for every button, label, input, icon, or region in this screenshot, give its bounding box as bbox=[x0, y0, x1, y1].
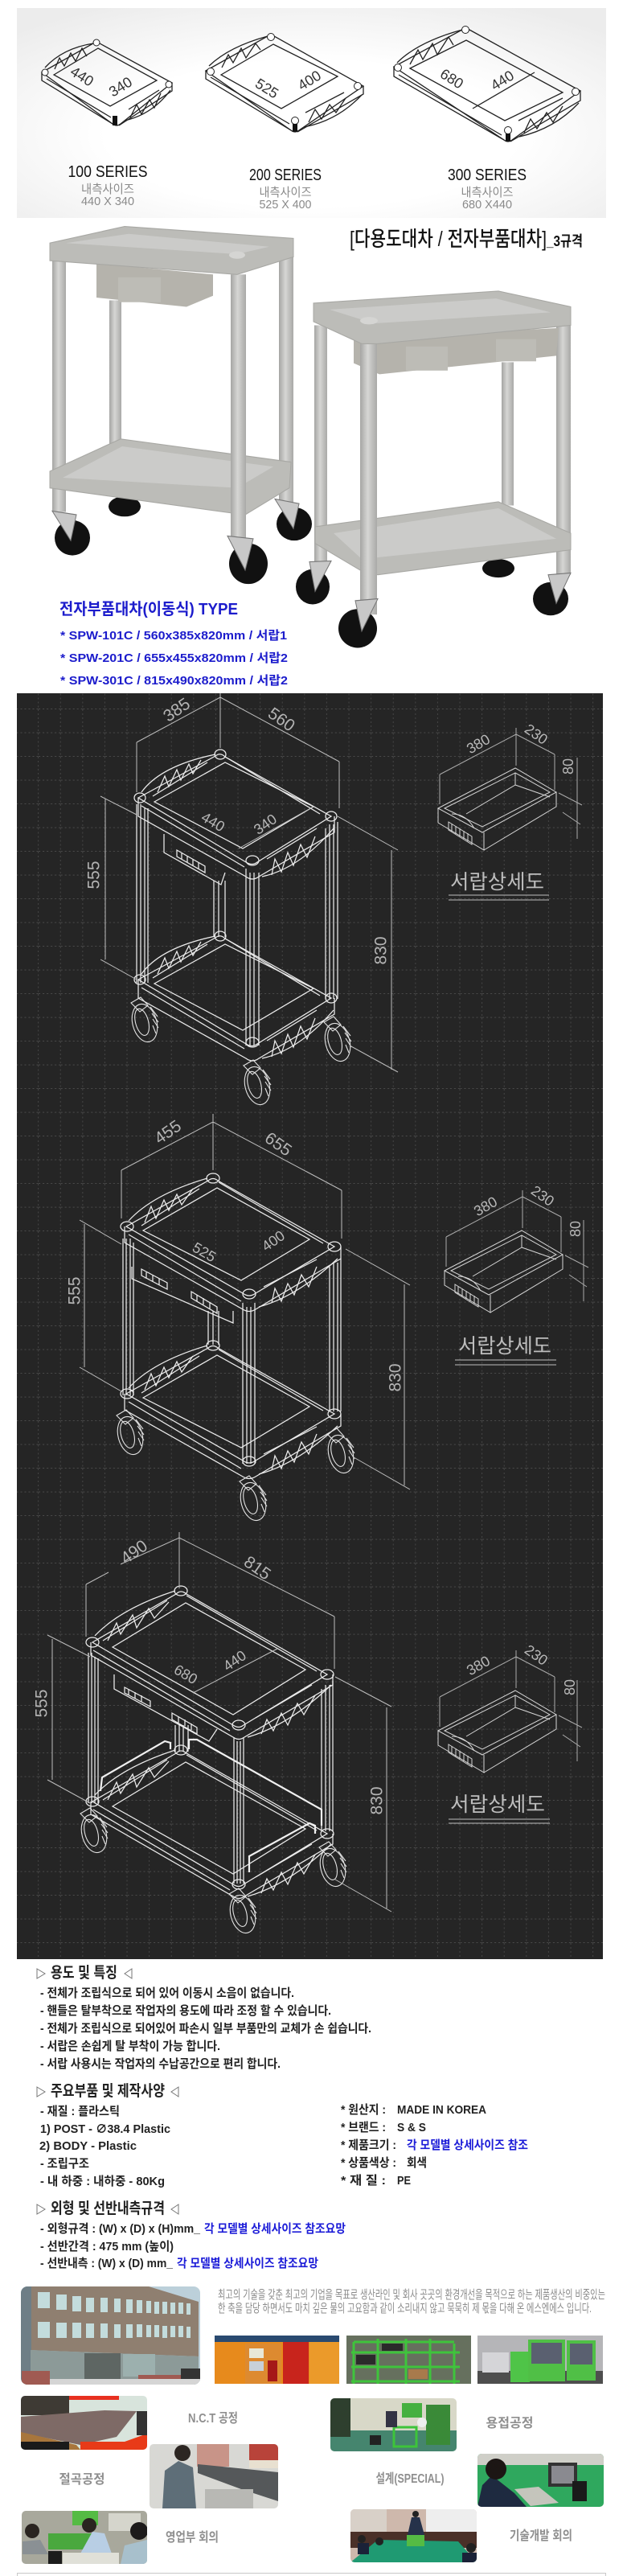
section: main parts and specifications: PE bbox=[397, 2174, 411, 2188]
section: main parts and specifications: 각 모델별 상세사이즈 참조 bbox=[407, 2138, 528, 2152]
label: drawer detail 3: 서랍상세도 bbox=[450, 1793, 545, 1816]
drawing: 300 series tray: 440 bbox=[488, 68, 517, 93]
section: outer size and shelf inner size bbox=[37, 2200, 346, 2270]
label: drawer detail 2 bbox=[455, 1335, 556, 1365]
label: NCT process: N.C.T 공정 bbox=[188, 2411, 238, 2426]
dimensions: SPW-201C: 830 bbox=[386, 1363, 405, 1392]
label: bending process: 절곡공정 bbox=[59, 2472, 104, 2487]
label: welding process: 용접공정 bbox=[486, 2416, 534, 2430]
text block: model list: 전자부품대차(이동식) TYPE bbox=[59, 600, 238, 618]
section: main parts and specifications: 회색 bbox=[407, 2156, 427, 2170]
dimensions: SPW-201C: 525 bbox=[190, 1239, 219, 1265]
panel: technical drawings bbox=[17, 693, 603, 1959]
dimensions: SPW-101C: 555 bbox=[85, 861, 103, 889]
panel: shelf series sizes bbox=[17, 8, 606, 218]
series labels: 100: 100 SERIES bbox=[68, 163, 148, 181]
drawing: 300 series tray: 680 bbox=[437, 66, 466, 92]
label: drawer detail 1: 서랍상세도 bbox=[450, 871, 544, 894]
dimensions: SPW-101C: 440 bbox=[199, 809, 227, 835]
drawing: SPW-301C cart bbox=[77, 1586, 350, 1936]
heading: main parts: 주요부품 및 제작사양 bbox=[51, 2082, 165, 2100]
section: outer size and shelf inner size: - 선반내측 : (W) x (D) mm_ bbox=[40, 2257, 174, 2270]
handles: SPW-301C bbox=[100, 1740, 322, 1872]
drawing: 300 series tray bbox=[394, 26, 580, 142]
section: outer size and shelf inner size: 각 모델별 상세사이즈 참조요망 bbox=[177, 2257, 318, 2270]
section: uses and features: - 핸들은 탈부착으로 작업자의 용도에 따라 조정 할 수 있습니다. bbox=[40, 2004, 331, 2018]
series labels: 300: 내측사이즈 bbox=[461, 186, 514, 199]
section: uses and features bbox=[37, 1964, 371, 2071]
heading: uses and features: 용도 및 특징 bbox=[51, 1964, 117, 1982]
drawing: drawer detail 2: 230 bbox=[528, 1182, 557, 1210]
photo: sales meeting bbox=[22, 2511, 148, 2564]
series labels: 200: 200 SERIES bbox=[249, 166, 322, 184]
dimensions: SPW-201C: 655 bbox=[261, 1129, 295, 1160]
drawing: drawer detail 1: 380 bbox=[464, 731, 493, 757]
text block: company intro bbox=[218, 2288, 605, 2315]
section: outer size and shelf inner size: - 선반간격 : 475 mm (높이) bbox=[40, 2240, 174, 2253]
drawing: SPW-101C cart bbox=[128, 750, 354, 1107]
text block: model list: * SPW-101C / 560x385x820mm / 서랍1 bbox=[60, 629, 287, 643]
section: main parts and specifications: * 상품색상 : bbox=[341, 2156, 396, 2170]
section: uses and features: - 전체가 조립식으로 되어 있어 이동시 소음이 없습니다. bbox=[40, 1986, 294, 2000]
section: main parts and specifications: * 제품크기 : bbox=[341, 2138, 396, 2152]
series labels: 100 bbox=[68, 163, 148, 208]
label: design work: 설계(SPECIAL) bbox=[376, 2471, 444, 2486]
section: main parts and specifications: 2) BODY - Plastic bbox=[39, 2139, 137, 2153]
drawing: drawer detail 3: 380 bbox=[464, 1653, 493, 1678]
section: main parts and specifications: S & S bbox=[397, 2121, 426, 2134]
heading: product title: [다용도대차 / 전자부품대차] bbox=[350, 227, 547, 251]
section: main parts and specifications: - 내 하중 : 내하중 - 80Kg bbox=[40, 2175, 165, 2188]
dimensions: SPW-201C: 455 bbox=[151, 1117, 185, 1148]
photo: factory building bbox=[21, 2286, 200, 2385]
photo: cart with two drawers bbox=[296, 291, 571, 647]
section: main parts and specifications bbox=[37, 2082, 528, 2188]
section: main parts and specifications: * 재 질 : bbox=[341, 2174, 386, 2188]
drawing: 100 series tray: 440 bbox=[68, 64, 96, 89]
section: uses and features: - 서랍은 손쉽게 탈 부착이 가능 합니다. bbox=[40, 2040, 220, 2053]
footer box edge bbox=[18, 2574, 606, 2576]
section: main parts and specifications: 1) POST - ∅38.4 Plastic bbox=[40, 2122, 170, 2136]
photo: bending process bbox=[150, 2444, 278, 2508]
drawing: drawer detail 3: 80 bbox=[562, 1679, 578, 1695]
section: outer size and shelf inner size: 각 모델별 상세사이즈 참조요망 bbox=[204, 2222, 346, 2236]
dimensions: SPW-101C: 385 bbox=[160, 695, 194, 725]
section: main parts and specifications: - 조립구조 bbox=[40, 2157, 89, 2171]
series labels: 100: 내측사이즈 bbox=[81, 183, 134, 196]
series labels: 300 bbox=[448, 166, 527, 212]
drawing: 100 series tray: 340 bbox=[106, 74, 135, 100]
series labels: 200: 525 X 400 bbox=[259, 198, 312, 212]
heading: outer size: 외형 및 선반내측규격 bbox=[51, 2200, 165, 2217]
series labels: 300: 300 SERIES bbox=[448, 166, 527, 184]
dimensions: SPW-101C bbox=[85, 693, 398, 1072]
dimensions: SPW-301C: 680 bbox=[171, 1662, 200, 1687]
dimensions: SPW-301C: 830 bbox=[368, 1786, 386, 1815]
heading: product title: _3규격 bbox=[546, 233, 583, 249]
text block: model list: * SPW-301C / 815x490x820mm / 서랍2 bbox=[60, 674, 288, 688]
series labels: 300: 680 X440 bbox=[462, 198, 512, 212]
drawing: 200 series tray: 525 bbox=[252, 76, 281, 101]
series labels: 200: 내측사이즈 bbox=[259, 186, 312, 199]
drawing: SPW-201C cart bbox=[113, 1173, 358, 1523]
series labels: 100: 440 X 340 bbox=[81, 195, 134, 208]
drawing: drawer detail 1: 80 bbox=[560, 758, 576, 774]
label: technology meeting: 기술개발 회의 bbox=[510, 2529, 572, 2543]
photo: cart with one drawer bbox=[50, 227, 312, 584]
section: main parts and specifications: - 재질 : 플라스틱 bbox=[40, 2105, 120, 2118]
section: outer size and shelf inner size: - 외형규격 : (W) x (D) x (H)mm_ bbox=[40, 2222, 201, 2236]
dimensions: SPW-201C bbox=[66, 1114, 410, 1489]
drawing: drawer detail 2: 380 bbox=[471, 1194, 500, 1219]
photo: orange cabinets bbox=[215, 2336, 339, 2384]
label: drawer detail 2: 서랍상세도 bbox=[458, 1335, 551, 1358]
photo: green storage cabinets bbox=[477, 2336, 603, 2384]
drawing: drawer detail 2 bbox=[445, 1182, 588, 1313]
dimensions: SPW-201C: 555 bbox=[66, 1276, 84, 1305]
drawing: drawer detail 2: 80 bbox=[568, 1221, 584, 1237]
dimensions: SPW-301C: 555 bbox=[32, 1689, 51, 1718]
dimensions: SPW-301C: 815 bbox=[240, 1553, 274, 1584]
section: uses and features: - 서랍 사용시는 작업자의 수납공간으로 편리 합니다. bbox=[40, 2057, 281, 2071]
dimensions: SPW-101C: 560 bbox=[264, 705, 298, 735]
section: main parts and specifications: MADE IN KOREA bbox=[397, 2103, 486, 2117]
dimensions: SPW-101C: 830 bbox=[371, 936, 391, 965]
dimensions: SPW-301C: 440 bbox=[220, 1647, 249, 1674]
dimensions: SPW-101C: 340 bbox=[251, 811, 280, 838]
label: drawer detail 3 bbox=[449, 1793, 550, 1823]
dimensions: SPW-201C: 400 bbox=[259, 1227, 288, 1255]
photo: green racks bbox=[346, 2336, 471, 2384]
drawing: drawer detail 3: 230 bbox=[522, 1641, 551, 1669]
dimensions: SPW-301C bbox=[32, 1532, 391, 1912]
drawing: drawer detail 3 bbox=[438, 1641, 582, 1773]
photo: NCT process bbox=[21, 2396, 147, 2450]
dimensions: SPW-301C: 490 bbox=[117, 1537, 151, 1567]
drawing: 200 series tray: 400 bbox=[295, 68, 324, 93]
text block: model list bbox=[59, 600, 288, 688]
drawing: 100 series tray bbox=[42, 39, 172, 125]
series labels: 200 bbox=[249, 166, 322, 212]
label: sales meeting: 영업부 회의 bbox=[166, 2530, 219, 2545]
section: uses and features: - 전체가 조립식으로 되어있어 파손시 일부 부품만의 교체가 손 쉽습니다. bbox=[40, 2022, 371, 2036]
drawing: drawer detail 1: 230 bbox=[522, 721, 551, 748]
photo: technology meeting bbox=[350, 2509, 477, 2562]
photo: welding process bbox=[330, 2398, 457, 2451]
drawing: drawer detail 1 bbox=[438, 721, 582, 850]
text block: model list: * SPW-201C / 655x455x820mm / 서랍2 bbox=[60, 651, 288, 665]
section: main parts and specifications: * 브랜드 : bbox=[341, 2121, 386, 2134]
photo: design work bbox=[477, 2454, 604, 2507]
section: main parts and specifications: * 원산지 : bbox=[341, 2103, 386, 2117]
drawing: 200 series tray bbox=[206, 34, 363, 132]
